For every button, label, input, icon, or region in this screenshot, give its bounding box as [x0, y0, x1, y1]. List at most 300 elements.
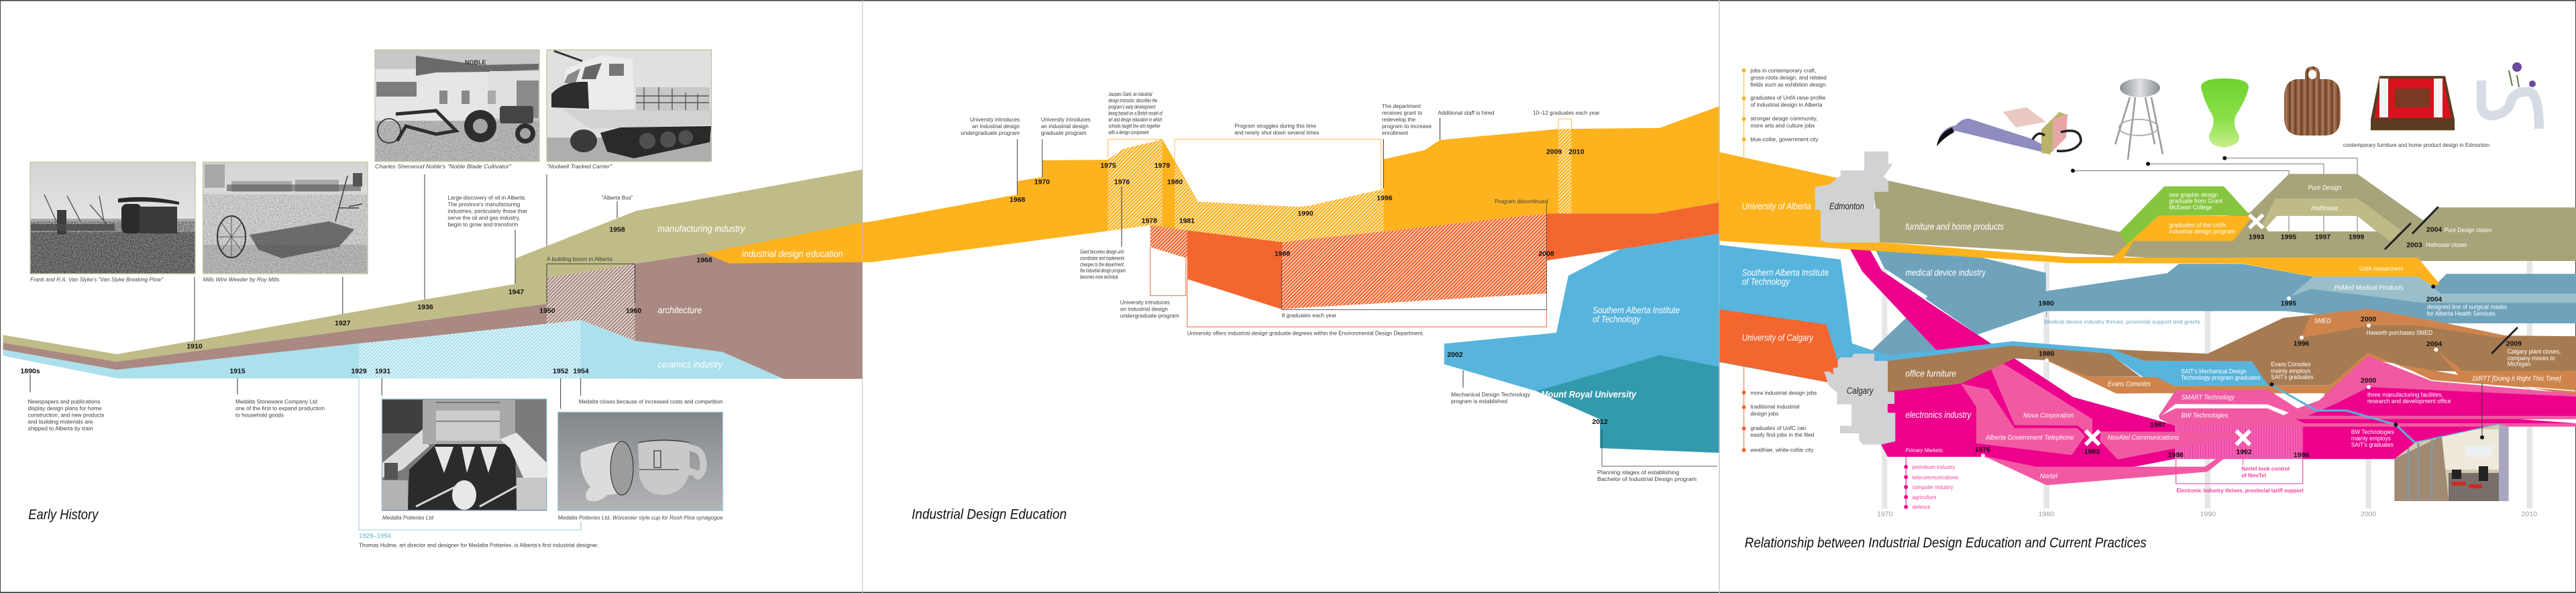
panel: relationship between education and practice — [1719, 62, 2576, 551]
caption: Noble: Charles Sherwood Noble's "Noble Blade Cultivator" — [375, 163, 512, 170]
event: 1996 grant: enrollment — [1382, 129, 1409, 136]
event: 2004 surgical masks: designed line of surgical masks — [2427, 303, 2507, 311]
event: 2012 Mount Royal planning: 2012 — [1592, 418, 1608, 426]
event: 2009 2010 graduates: 2010 — [1568, 148, 1585, 156]
icon: slash 2009 — [2491, 327, 2518, 354]
photo: Van Slyke breaking plow — [30, 162, 195, 274]
note: BW Technologies employs SAIT graduates — [2351, 423, 2398, 449]
stream: PriMed Medical Products — [2290, 276, 2576, 303]
event: 1890s: shipped to Alberta by train — [28, 425, 93, 432]
divider: panel edges — [862, 0, 1720, 593]
label: SMED: SMED — [2314, 317, 2331, 325]
event: building boom 1950-1960: 1950 — [539, 307, 555, 315]
stream: Evans Consoles — [2047, 360, 2284, 394]
icon: closure slashes — [2385, 207, 2438, 250]
event: 1954 Medalta closes — [573, 368, 723, 405]
list: primary markets: petroleum industry — [1913, 464, 1955, 470]
gap between SMART and BW — [2161, 404, 2289, 415]
event: 2009 2010 graduates: 2009 — [1546, 148, 1562, 156]
label: SAIT: Southern Alberta Institute — [1593, 305, 1680, 315]
photo: Medalta Potteries display — [382, 399, 547, 510]
label: BW Technologies: BW Technologies — [2182, 412, 2229, 420]
event: 1970 graduate program: 1970 — [1034, 178, 1050, 186]
stream: University of Alberta — [1719, 152, 2440, 286]
photo: Noble blade cultivator — [375, 50, 539, 162]
event: 1988 to 2008 graduates: 1988 — [1275, 250, 1290, 258]
product: cutting board — [2284, 66, 2341, 136]
outline: electronic industry thrives bracket — [2176, 459, 2303, 484]
event: 1947 oil discovery — [447, 194, 527, 296]
label: Evans Consoles: Evans Consoles — [2108, 380, 2151, 388]
note: Jacques Giard quote: art and design education in which — [1108, 117, 1163, 123]
event: 2004 DIRTT: 2004 — [2426, 340, 2442, 348]
label: industrial design education: industrial design education — [742, 249, 843, 259]
stream: Hothouse — [2260, 199, 2402, 241]
icon: researcher dot — [2431, 284, 2435, 288]
event: 1976 Giard coordinator: the industrial design program — [1080, 268, 1126, 274]
years: 1978 to 1981: 1978 — [1142, 217, 1157, 225]
event: 1980 medical device thrives — [2039, 300, 2200, 325]
note: Nortel took control: of NovTel — [2241, 472, 2266, 479]
photo: Noble blade cultivator: NOBLE — [465, 59, 486, 66]
note: BW Technologies employs SAIT graduates: BW Technologies — [2351, 429, 2394, 436]
event: 1929 1931 — [351, 368, 390, 396]
note: Jacques Giard quote: schools taught fine arts together — [1108, 123, 1161, 129]
label: furniture and home products: furniture and home products — [1905, 221, 2004, 232]
bullet list: University of Calgary outcomes: traditional industrial — [1750, 403, 1799, 410]
label: office furniture: office furniture — [1905, 369, 1956, 378]
event: 1980 Evans Consoles spin-off — [2039, 349, 2055, 362]
axis years — [1877, 510, 2537, 518]
years: 1988 1996: 1988 — [2168, 451, 2184, 460]
stream chart: manufacturing, architecture and ceramics — [3, 170, 863, 379]
label: SAIT mechanical design graduates: SAIT's Mechanical Design — [2181, 368, 2247, 376]
stream chart: university of alberta program — [704, 106, 1719, 309]
stream: SAIT in practice — [1719, 245, 2271, 386]
text: electronic industry thrives: Electronic industry thrives, provincial tariff support — [2176, 487, 2304, 494]
stream: medical device left fragment — [1872, 318, 1936, 361]
event: 2004 surgical masks: for Alberta Health Services — [2427, 310, 2496, 318]
event: 2009 plant closes: company moves to — [2508, 355, 2555, 362]
event: 2009 plant closes — [2506, 340, 2561, 368]
event: 2000 Haworth — [2361, 315, 2432, 337]
product: white vase — [2481, 62, 2539, 129]
event: 1927 — [335, 277, 351, 327]
event: additional staff — [1438, 109, 1495, 140]
label: ceramics industry: ceramics industry — [657, 360, 723, 370]
bullet list: University of Alberta outcomes: more arts and culture jobs — [1750, 122, 1815, 129]
event: 1890s: display design plans for home — [28, 405, 102, 412]
event: 1890s: Newspapers and publications — [28, 398, 101, 405]
label: Pure Design: Pure Design — [2308, 184, 2341, 192]
event: 1890s: construction, and new products — [28, 412, 105, 419]
axis years: 2000 — [2361, 510, 2376, 518]
event: 1988 to 2008 graduates: 8 graduates each year — [1282, 312, 1336, 319]
bullet list: University of Alberta outcomes: stronger design community, — [1750, 115, 1817, 122]
timeline bars — [1882, 261, 2532, 508]
event: 1929 1931: 1929 — [351, 368, 367, 376]
event: 1954 Medalta closes: 1954 — [573, 368, 589, 376]
event: 2009 2010 graduates: 10–12 graduates each year — [1533, 109, 1600, 116]
event: 1947 oil discovery: industries, particularly those that — [447, 207, 527, 214]
event: 1970 graduate program: University introduces — [1041, 116, 1091, 123]
event: 1970 graduate program: graduate program — [1041, 129, 1087, 136]
stream: University of Calgary — [1719, 309, 1838, 382]
years: Pure Design timeline — [2249, 233, 2365, 241]
axis years: 2010 — [2522, 510, 2537, 518]
event: 1970 graduate program — [1034, 116, 1091, 186]
product: bookshelf chair — [1937, 107, 2081, 154]
bullet list: University of Calgary outcomes — [1742, 367, 1817, 453]
event: 2009 plant closes: Calgary plant closes, — [2508, 348, 2561, 356]
event: 2002 SAIT program — [1447, 351, 1531, 405]
event: 1987 SMART and BW: 1987 — [2150, 421, 2166, 429]
bullet list: University of Calgary outcomes: easily find jobs in the filed — [1750, 431, 1815, 438]
event: 1890s: 1890s — [20, 368, 40, 376]
year: 1990: 1990 — [1297, 209, 1313, 217]
label: University of Calgary: University of Calgary — [1742, 333, 1814, 343]
label: SMART Technology: SMART Technology — [2182, 393, 2235, 401]
label: UofA graduates — [2169, 221, 2235, 235]
year: 1983: 1983 — [2084, 448, 2100, 456]
note: Evans Consoles employs SAIT graduates: Evans Consoles — [2271, 361, 2311, 368]
stream: medical device industry — [1876, 250, 2576, 335]
event: 1976 Giard coordinator: coordinator and implements — [1080, 255, 1124, 262]
event: 2000 Haworth: 2000 — [2361, 315, 2376, 323]
stream: SMART, BW Technologies and manufacturing — [2157, 356, 2576, 427]
event: 2009 2010 graduates — [1533, 109, 1600, 156]
label: SAIT: of Technology — [1593, 314, 1641, 325]
bullet list: University of Alberta outcomes: gross-roots design, and related — [1750, 74, 1827, 81]
product: metal stool — [2115, 78, 2163, 160]
city: Calgary — [1824, 354, 1895, 445]
stream: magenta manufacturing facilities — [2296, 387, 2576, 459]
event: building boom 1950-1960 — [539, 256, 641, 315]
label: graphic design graduates: one graphic design — [2169, 192, 2218, 199]
event: 2002 SAIT program: Mechanical Design Technology — [1451, 391, 1531, 398]
event: 2000 facilities — [2361, 377, 2451, 405]
event: 1996 SMED — [2294, 335, 2309, 348]
leader lines: products to companies — [2073, 158, 2357, 174]
event: 2012 Mount Royal planning: Planning stages of establishing — [1597, 469, 1679, 476]
event: 2004 DIRTT — [2426, 340, 2442, 352]
gap above pink spin-offs — [2412, 370, 2465, 382]
line: Nodwell leader — [546, 174, 547, 246]
stream: Mount Royal University — [1536, 355, 1719, 453]
photo: Nodwell tracked carrier — [547, 50, 711, 162]
event: 1976 Giard coordinator — [1080, 178, 1130, 280]
axis years: 1990 — [2200, 510, 2216, 518]
stream: Southern Alberta Institute of Technology — [1444, 233, 1719, 391]
label: graphic design graduates — [2169, 192, 2222, 211]
list: primary markets: defence — [1913, 504, 1931, 510]
label: Nova Corporation: Nova Corporation — [2023, 412, 2074, 420]
bullet list: University of Calgary outcomes: graduates of UofC can — [1750, 425, 1807, 431]
event: building boom 1950-1960: A building boom in Alberta — [547, 256, 612, 262]
caption: Nodwell: "Nodwell Tracked Carrier" — [547, 163, 612, 170]
event: 2004 Pure Design closes: Pure Design closes — [2445, 227, 2492, 234]
note: Jacques Giard quote: Jacques Giard, an industrial — [1108, 91, 1152, 97]
event: 1996 grant: receives grant to — [1382, 109, 1422, 116]
event: 1947 oil discovery: serve the oil and gas industry, — [447, 214, 520, 221]
event: 2004 Pure Design closes — [2426, 226, 2492, 234]
stream: furniture and home products — [1872, 174, 2576, 261]
callout: 1929-1954 Thomas Hulme: Thomas Hulme, art director and designer for Medalta Potteries, is Alberta's first industrial designer. — [359, 542, 598, 549]
event: 1976 Giard coordinator: changes to the department: — [1080, 262, 1124, 268]
event: 1995 PriMed: 1995 — [2281, 300, 2296, 308]
note: Nortel took control — [2241, 459, 2290, 479]
label: SAIT — [1593, 305, 1680, 325]
outline: Thomas Hulme period — [359, 378, 581, 530]
stream: office furniture — [1888, 345, 2141, 392]
event: 1975: 1975 — [1100, 162, 1116, 170]
stream: electronics industry ribbon — [1850, 250, 2176, 467]
bullet list: University of Alberta outcomes: fields such as exhibition design — [1750, 81, 1826, 88]
text: university of calgary undergraduate: undergraduate program — [1120, 313, 1179, 319]
note: BW Technologies employs SAIT graduates: mainly employs — [2351, 435, 2391, 443]
leader: DIRTT to photo — [2480, 383, 2484, 439]
label: University of Alberta: University of Alberta — [1742, 201, 1811, 211]
event: 2000 Haworth: Haworth purchases SMED — [2367, 329, 2432, 337]
event: 1890s: and building materials are — [28, 419, 93, 425]
caption: Worcester cup: Medalta Potteries Ltd, Worcester style cup for Rosh Pina synagogue — [558, 514, 723, 521]
event: 1996 grant: 1996 — [1377, 194, 1393, 202]
event: 1968 undergraduate program: an industrial design — [972, 123, 1020, 129]
label: electronics industry: electronics industry — [1905, 410, 1972, 420]
panel: industrial design education — [696, 91, 1719, 522]
bullet list: University of Calgary outcomes: wealthier, white-collar city — [1750, 447, 1814, 453]
event: 1996 SMED: 1996 — [2294, 340, 2309, 348]
text: program struggles: Program struggles during this time — [1234, 123, 1316, 129]
event: 2002 SAIT program: 2002 — [1447, 351, 1463, 359]
icon: closure cross 1993 — [2249, 215, 2263, 228]
note: Jacques Giard quote: being based on a British model of — [1108, 110, 1163, 117]
note: Jacques Giard quote: design instructor, describes the — [1108, 98, 1157, 103]
label: SAIT mechanical design graduates: Technology program graduates — [2181, 374, 2261, 382]
event: 2000 facilities: research and development office — [2367, 398, 2451, 405]
city: Calgary: Calgary — [1847, 386, 1874, 396]
event: 2009 plant closes: 2009 — [2506, 340, 2522, 348]
event: 1954 Medalta closes: Medalta closes because of increased costs and competition — [579, 398, 723, 405]
photo: DIRTT office — [2394, 424, 2509, 501]
label: SAIT left — [1742, 268, 1829, 287]
bullet list: University of Calgary outcomes: more industrial design jobs — [1750, 389, 1817, 396]
bullet list: University of Alberta outcomes: of industrial design in Alberta — [1750, 101, 1823, 108]
stream: orange border of apex — [2269, 353, 2576, 397]
event: 1915: Medalta Stoneware Company Ltd — [235, 398, 317, 405]
event: 1947 oil discovery: The province's manufacturing — [447, 201, 521, 207]
city: Edmonton — [1815, 152, 1893, 243]
bullet list: University of Alberta outcomes: blue-collar, government city — [1750, 136, 1819, 143]
photo: Mills wire weeder — [203, 162, 368, 274]
event: 1890s — [20, 368, 105, 432]
callout: 1929-1954 Thomas Hulme: 1929–1954 — [359, 533, 391, 540]
list: primary markets: Primary Markets: — [1905, 447, 1944, 453]
product: red type box — [2371, 76, 2455, 130]
event: 1980 medical device thrives: 1980 — [2039, 300, 2054, 308]
event: 1958 Alberta Bus: "Alberta Bus" — [601, 194, 633, 201]
note: Evans Consoles employs SAIT graduates: mainly employs — [2271, 368, 2311, 375]
list: primary markets: agriculture — [1913, 494, 1937, 500]
label: medical device industry: medical device industry — [1905, 268, 1986, 278]
event: 1936: 1936 — [417, 303, 433, 311]
years: Pure Design timeline: 1999 — [2349, 233, 2365, 241]
event: 1968 undergraduate program: 1968 — [1010, 196, 1025, 204]
text: university of calgary undergraduate — [1120, 299, 1179, 319]
year: 1968: 1968 — [696, 256, 712, 264]
bullet list: University of Calgary outcomes: design jobs — [1750, 411, 1778, 417]
title: Industrial Design Education: Industrial Design Education — [912, 507, 1067, 522]
bullet list: University of Alberta outcomes: graduates of UofA raise profile — [1750, 95, 1826, 101]
event: 1996 grant: The department — [1382, 103, 1421, 109]
event: 1952: 1952 — [553, 368, 569, 376]
label: NovAtel Communications: NovAtel Communications — [2108, 433, 2180, 441]
stream: brown office furniture continued — [2112, 309, 2576, 386]
label: graphic design graduates: graduate from Grant — [2169, 197, 2222, 205]
event: 1976 Nortel: 1976 — [1975, 446, 1990, 454]
event: 1958 Alberta Bus — [601, 194, 633, 234]
event: 2003 Hothouse closes: 2003 — [2406, 241, 2422, 249]
event: 1996 grant: program to increase — [1382, 123, 1432, 129]
product: green stool — [2201, 78, 2249, 148]
event: 1976 Giard coordinator: becomes more technical. — [1080, 274, 1119, 280]
note: Jacques Giard quote — [1108, 91, 1163, 136]
event: 1968 undergraduate program — [961, 116, 1025, 204]
caption: Mills: Mills Wire Weeder by Roy Mills — [203, 276, 280, 283]
event: 1929 1931: 1931 — [375, 368, 390, 376]
event: 1980 Evans Consoles spin-off: 1980 — [2039, 349, 2055, 358]
event: 1915: one of the first to expand production — [235, 405, 325, 412]
photo: Worcester style cups — [558, 412, 722, 510]
label: graphic design graduates: McEwan College — [2169, 204, 2212, 211]
leader dots — [2071, 156, 2226, 173]
stream: SMED — [2302, 309, 2508, 338]
event: 1910 — [186, 277, 203, 351]
icon: closure cross 1992 — [2237, 431, 2250, 445]
label: DIRTT: DIRTT [Doing it Right This Time] — [2473, 375, 2562, 383]
text: program struggles — [1234, 123, 1320, 136]
gap under Hothouse — [2266, 216, 2377, 231]
line: DIRTT white edge — [2465, 382, 2576, 392]
callout: 1929-1954 Thomas Hulme — [359, 533, 598, 549]
event: 2004 surgical masks — [2426, 295, 2507, 318]
event: 1988 to 2008 graduates — [1275, 198, 1554, 319]
event: 1987 SMART and BW — [2150, 416, 2166, 429]
event: additional staff: Additional staff is hired — [1438, 109, 1495, 116]
note: Jacques Giard quote: program's early development — [1108, 104, 1156, 110]
event: 1968 undergraduate program: University introduces — [970, 116, 1020, 123]
label: Nortel: Nortel — [2040, 472, 2057, 480]
event: 1910: 1910 — [186, 343, 203, 351]
list: primary markets: computer industry — [1913, 484, 1953, 490]
year: 1992: 1992 — [2236, 448, 2252, 456]
label: UofA graduates: industrial design program — [2169, 228, 2235, 235]
label: Alberta Government Telephone: Alberta Government Telephone — [1985, 433, 2074, 441]
event: building boom 1950-1960: 1960 — [626, 307, 641, 315]
stream: NovAtel Communications — [2100, 431, 2240, 460]
text: university of calgary undergraduate: University introduces — [1120, 299, 1170, 306]
event: 2000 facilities: 2000 — [2361, 377, 2376, 385]
event: 2012 Mount Royal planning — [1592, 418, 1717, 482]
stream: DIRTT — [2436, 349, 2576, 390]
label: UofA graduates: graduates of the UofA — [2169, 221, 2226, 229]
label: PriMed Medical Products: PriMed Medical Products — [2334, 284, 2404, 292]
stream: light pink electronics spin-offs — [1961, 364, 2239, 485]
note: Nortel took control: Nortel took control — [2241, 466, 2290, 472]
years: 1978 to 1981 — [1142, 162, 1195, 225]
years: 1978 to 1981: 1979 — [1155, 162, 1170, 170]
note: Evans Consoles employs SAIT graduates: SAIT's graduates — [2271, 374, 2314, 381]
title: Early History: Early History — [28, 507, 99, 523]
text: university of calgary undergraduate: an industrial design — [1120, 306, 1168, 313]
label: Mount Royal University: Mount Royal University — [1541, 389, 1637, 400]
label: architecture: architecture — [657, 305, 702, 315]
label: SAIT left: of Technology — [1742, 276, 1790, 287]
event: 1988 to 2008 graduates: 2008 — [1538, 250, 1554, 258]
event: 1976 Giard coordinator: 1976 — [1114, 178, 1130, 186]
city: Edmonton: Edmonton — [1829, 201, 1864, 211]
event: 1988 to 2008 graduates: Program discontinued — [1495, 198, 1548, 205]
panel: early history — [3, 50, 863, 549]
event: 2002 SAIT program: program is established — [1451, 398, 1507, 405]
event: 2003 Hothouse closes — [2406, 241, 2467, 249]
caption: contemporary design: contemporary furniture and home product design in Edmonton — [2343, 142, 2489, 148]
outline: hatch brackets — [1108, 119, 1572, 327]
gap: tapering white wedge — [2520, 419, 2576, 423]
event: 1952 — [553, 368, 569, 409]
years: Pure Design timeline: 1995 — [2281, 233, 2296, 241]
text: program struggles: and nearly shut down several times — [1234, 129, 1320, 136]
label: Hothouse: Hothouse — [2311, 205, 2338, 213]
event: 1980 medical device thrives: Medical device industry thrives, provincial support and grants — [2044, 318, 2200, 325]
label: UofA researchers: UofA researchers — [2359, 266, 2404, 272]
event: 1996 grant — [1377, 103, 1432, 202]
hatch: NovAtel Nortel overlap — [2176, 427, 2303, 459]
years: 1978 to 1981: 1981 — [1179, 217, 1195, 225]
stream: graphic design graduates — [2120, 186, 2250, 245]
event: 1996 grant: redevelop the — [1382, 116, 1415, 123]
years: 1978 to 1981: 1980 — [1167, 178, 1183, 186]
event: 1968 undergraduate program: undergraduate program — [961, 129, 1020, 136]
event: 1927: 1927 — [335, 319, 351, 327]
caption: Medalta Potteries: Medalta Potteries Ltd — [382, 514, 433, 521]
event: 1947 oil discovery: 1947 — [508, 288, 524, 296]
event: 2012 Mount Royal planning: Bachelor of Industrial Design program — [1597, 476, 1697, 482]
bullet list: University of Alberta outcomes — [1742, 67, 1827, 157]
list: primary markets — [1904, 447, 1958, 510]
event: 1970 graduate program: an industrial design — [1041, 123, 1089, 129]
bullet list: University of Alberta outcomes: jobs in contemporary craft, — [1750, 67, 1816, 74]
leader lines through gap — [2289, 215, 2357, 231]
list: primary markets: telecommunications — [1913, 474, 1958, 480]
text: graduate degrees: University offers industrial design graduate degrees within the Environmental Design Department. — [1187, 330, 1424, 337]
event: 2004 surgical masks: 2004 — [2426, 295, 2442, 303]
label: manufacturing industry: manufacturing industry — [657, 224, 746, 233]
axis years: 1980 — [2039, 510, 2054, 518]
event: 2000 facilities: three manufacturing facilities, — [2367, 392, 2443, 398]
note: Evans Consoles employs SAIT graduates — [2270, 361, 2314, 386]
event: 1976 Nortel — [1975, 446, 1990, 457]
event: 2003 Hothouse closes: Hothouse closes — [2426, 241, 2467, 249]
years: Pure Design timeline: 1993 — [2249, 233, 2265, 241]
event: 2009 plant closes: Michigan — [2508, 361, 2531, 368]
years: Pure Design timeline: 1997 — [2315, 233, 2330, 241]
axis years: 1970 — [1877, 510, 1893, 518]
stream: SAIT thin graduate line — [2271, 385, 2500, 443]
event: 1947 oil discovery: begin to grow and transform — [447, 221, 518, 227]
note: BW Technologies employs SAIT graduates: SAIT's graduates — [2351, 441, 2394, 449]
years: 1988 1996: 1996 — [2294, 451, 2309, 460]
